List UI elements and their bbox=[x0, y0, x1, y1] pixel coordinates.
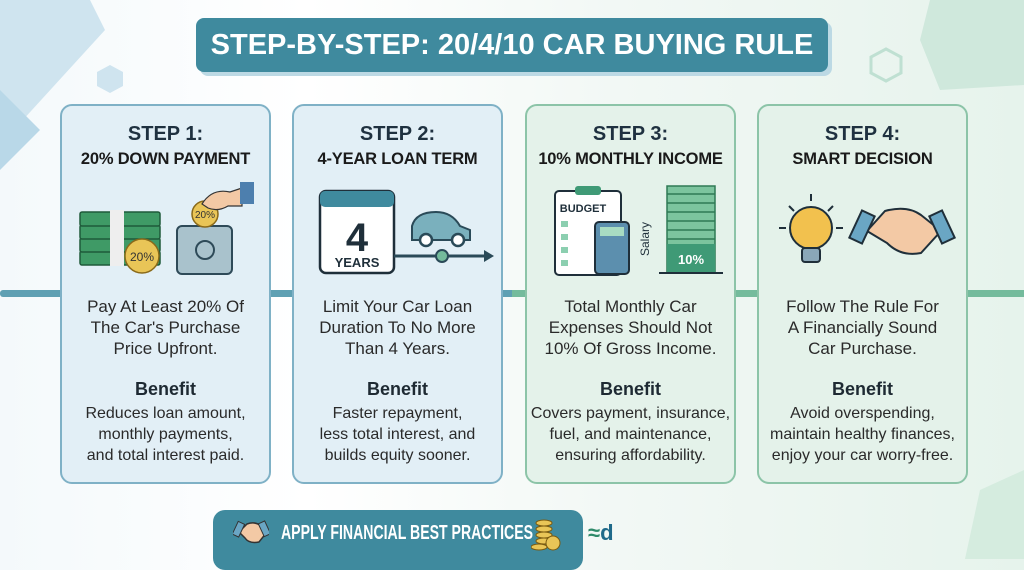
icon: calendar and car: YEARS bbox=[335, 255, 380, 270]
panel: step 4: Follow The Rule For bbox=[786, 297, 939, 316]
panel: step 3: 10% Of Gross Income. bbox=[545, 339, 716, 358]
icon: money and safe bbox=[79, 182, 254, 275]
icon: money and safe: 20% bbox=[130, 250, 154, 264]
icon: calendar and car: 4 bbox=[346, 216, 369, 260]
panel: step 2: builds equity sooner. bbox=[325, 447, 470, 464]
footer banner bbox=[213, 510, 583, 570]
panel: step 4: A Financially Sound bbox=[788, 318, 937, 337]
panel: step 4: SMART DECISION bbox=[792, 150, 933, 168]
panel: step 2: STEP 2: bbox=[360, 123, 435, 145]
panel: step 3: Total Monthly Car bbox=[564, 297, 697, 316]
panel: step 3: Benefit bbox=[600, 379, 661, 399]
panel: step 3: Expenses Should Not bbox=[549, 318, 712, 337]
panel: step 3: Covers payment, insurance, bbox=[531, 405, 730, 422]
panel: step 3: 10% MONTHLY INCOME bbox=[538, 150, 723, 168]
panel: step 1: The Car's Purchase bbox=[91, 318, 240, 337]
icon: budget and salary bar: BUDGET bbox=[560, 203, 606, 215]
logo: ≈d bbox=[588, 520, 614, 545]
icon: budget and salary bar: 10% bbox=[678, 252, 704, 267]
panel: step 1: Benefit bbox=[135, 379, 196, 399]
panel: step 2: Faster repayment, bbox=[333, 405, 462, 422]
panel: step 4 bbox=[757, 104, 968, 484]
icon: budget and salary bar bbox=[554, 185, 723, 276]
panel: step 3: STEP 3: bbox=[593, 123, 668, 145]
panel: step 2: less total interest, and bbox=[320, 426, 475, 443]
footer text: APPLY FINANCIAL BEST PRACTICES bbox=[281, 522, 533, 544]
panel: step 1: Pay At Least 20% Of bbox=[87, 297, 244, 316]
panel: step 4: Avoid overspending, bbox=[790, 405, 935, 422]
panel: step 1: and total interest paid. bbox=[87, 447, 244, 464]
panel: step 1: STEP 1: bbox=[128, 123, 203, 145]
panel: step 2: Duration To No More bbox=[319, 318, 476, 337]
panel: step 3 bbox=[525, 104, 736, 484]
panel: step 3: ensuring affordability. bbox=[555, 447, 706, 464]
panel: step 1: Reduces loan amount, bbox=[85, 405, 246, 422]
icon: handshake small bbox=[233, 520, 269, 544]
panel: step 1: monthly payments, bbox=[98, 426, 233, 443]
panel: step 4: enjoy your car worry-free. bbox=[772, 447, 953, 464]
panel: step 1 bbox=[60, 104, 271, 484]
panel: step 3: fuel, and maintenance, bbox=[550, 426, 711, 443]
panel: step 2: Limit Your Car Loan bbox=[323, 297, 472, 316]
icon: money and safe: 20% bbox=[195, 210, 215, 221]
panel: step 2: Benefit bbox=[367, 379, 428, 399]
panel: step 2: Than 4 Years. bbox=[345, 339, 450, 358]
title bbox=[196, 18, 828, 72]
panel: step 4: maintain healthy finances, bbox=[770, 426, 955, 443]
icon: bulb and handshake bbox=[779, 194, 956, 263]
panel: step 4: Benefit bbox=[832, 379, 893, 399]
panel: step 2: 4-YEAR LOAN TERM bbox=[318, 150, 477, 168]
panel: step 1: 20% DOWN PAYMENT bbox=[81, 150, 250, 168]
panel: step 2 bbox=[292, 104, 503, 484]
panel: step 4: STEP 4: bbox=[825, 123, 900, 145]
icon: calendar and car bbox=[318, 190, 494, 274]
panel: step 1: Price Upfront. bbox=[114, 339, 217, 358]
icon: coins bbox=[531, 520, 560, 550]
panel: step 4: Car Purchase. bbox=[808, 339, 917, 358]
title: STEP-BY-STEP: 20/4/10 CAR BUYING RULE bbox=[211, 29, 813, 61]
icon: budget and salary bar: Salary bbox=[638, 222, 652, 256]
